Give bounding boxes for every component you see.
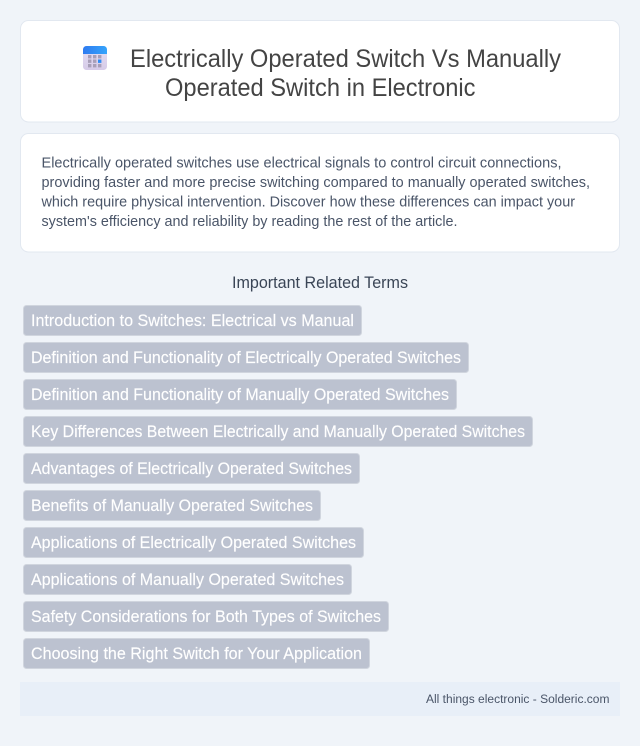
tag: key differences: Key Differences Between Electrically and Manually Operated Switches [31, 422, 525, 441]
footer bar [20, 682, 620, 716]
panel: title card [20, 20, 620, 122]
text block: introduction paragraph [41, 156, 590, 230]
title: Electrically Operated Switch Vs Manually [130, 45, 561, 73]
panel: introduction text card [20, 134, 620, 252]
text block: introduction paragraph: system's efficiency and reliability by reading the rest of the article. [42, 214, 458, 230]
tag: choosing [24, 638, 370, 668]
tag: benefits: Benefits of Manually Operated Switches [31, 496, 313, 515]
tag: electrically operated applications: Applications of Electrically Operated Switches [31, 533, 356, 552]
tag: manually operated definition [24, 380, 456, 410]
tag: electrically operated definition [24, 342, 468, 372]
tag: advantages [24, 454, 360, 484]
title [130, 45, 561, 102]
heading: important related terms: Important Related Terms [232, 274, 408, 292]
icon: calendar grid [83, 46, 107, 70]
text block: introduction paragraph: providing faster and more precise switching compared to manually operated switches, [42, 175, 590, 191]
title: Operated Switch in Electronic [165, 74, 476, 102]
tag: introduction [24, 306, 362, 336]
text block: introduction paragraph: Electrically operated switches use electrical signals to control circuit connections, [42, 156, 562, 172]
tag: manually operated applications [24, 564, 352, 594]
tag: electrically operated definition: Definition and Functionality of Electrically Operated Switches [31, 348, 461, 367]
tag: introduction: Introduction to Switches: Electrical vs Manual [31, 311, 354, 330]
tag: key differences [24, 416, 532, 446]
tag: electrically operated applications [24, 528, 364, 558]
tag: advantages: Advantages of Electrically Operated Switches [31, 459, 352, 478]
text block: introduction paragraph: which require physical intervention. Discover how these differences can impact your [41, 194, 575, 210]
tag: choosing: Choosing the Right Switch for Your Application [31, 644, 362, 663]
tag: manually operated applications: Applications of Manually Operated Switches [31, 570, 344, 589]
list of related term tags [24, 306, 532, 668]
tag: benefits [24, 490, 320, 520]
tag: safety [24, 602, 388, 632]
footer bar: All things electronic - Solderic.com [426, 692, 610, 706]
tag: safety: Safety Considerations for Both Types of Switches [31, 607, 381, 626]
tag: manually operated definition: Definition and Functionality of Manually Operated Switches [31, 385, 449, 404]
